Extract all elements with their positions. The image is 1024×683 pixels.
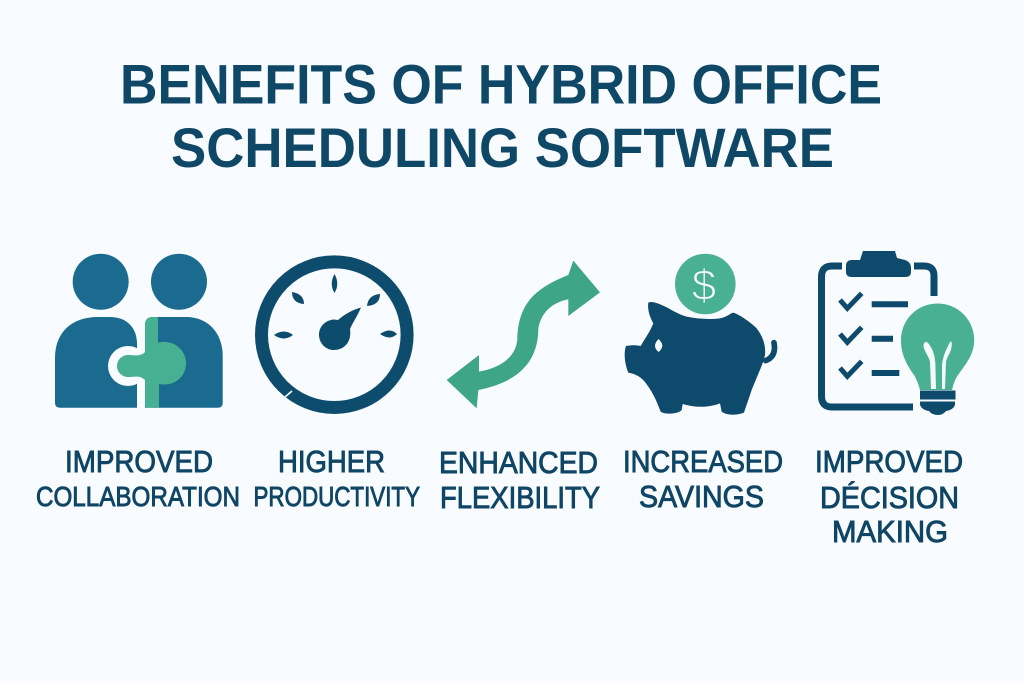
icon: coin with dollar sign: $ <box>692 261 716 310</box>
icon: light bulb <box>901 304 974 415</box>
panel: improved decision making <box>815 251 974 549</box>
label: ENHANCED <box>439 446 598 480</box>
label: SAVINGS <box>639 480 764 514</box>
panel: higher productivity <box>254 262 420 512</box>
label: INCREASED <box>623 445 783 479</box>
icon: piggy bank <box>625 302 774 415</box>
title: BENEFITS OF HYBRID OFFICE <box>120 52 882 116</box>
icon: two-way curved arrow <box>447 261 600 408</box>
label: IMPROVED <box>65 445 213 479</box>
label: DÉCISION <box>820 480 959 515</box>
icon: coin with dollar sign <box>675 254 736 314</box>
title <box>120 52 882 179</box>
panel: increased savings <box>623 254 783 514</box>
label <box>815 445 963 549</box>
panel: improved collaboration <box>36 254 240 512</box>
label: PRODUCTIVITY <box>254 481 420 512</box>
title: SCHEDULING SOFTWARE <box>171 116 834 179</box>
icon: clipboard checklist <box>822 251 934 407</box>
icon: two people with puzzle piece <box>55 254 223 408</box>
label: COLLABORATION <box>36 481 240 512</box>
label: HIGHER <box>278 445 385 479</box>
icon: speedometer gauge <box>262 262 407 408</box>
label <box>36 445 240 512</box>
label: MAKING <box>832 515 948 549</box>
label <box>623 445 783 514</box>
panel: enhanced flexibility <box>439 261 600 515</box>
label: FLEXIBILITY <box>440 481 600 515</box>
label <box>254 445 420 512</box>
label: IMPROVED <box>815 445 963 479</box>
label <box>439 446 600 515</box>
